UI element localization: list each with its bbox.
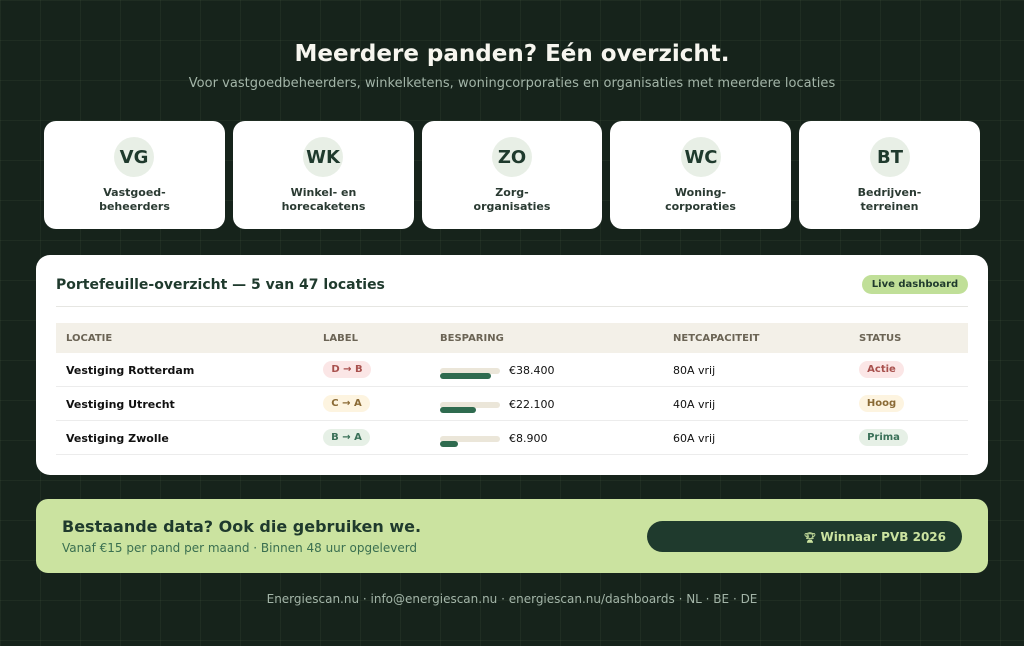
row 1 bar track bbox=[440, 368, 500, 374]
row 3 location: Vestiging Zwolle bbox=[66, 432, 169, 445]
card label bbox=[858, 186, 921, 213]
column: locatie: LOCATIE bbox=[66, 333, 112, 344]
card label bbox=[282, 186, 365, 213]
icon: VG bbox=[114, 137, 154, 177]
row 3 label: B → A bbox=[331, 432, 362, 443]
column: label: LABEL bbox=[323, 333, 358, 344]
panel heading: Portefeuille-overzicht — 5 van 47 locaties bbox=[56, 277, 385, 293]
row 1 location: Vestiging Rotterdam bbox=[66, 364, 194, 377]
card: zorgorganisaties bbox=[422, 121, 602, 229]
column: netcapaciteit: NETCAPACITEIT bbox=[673, 333, 760, 344]
table header row bbox=[56, 323, 968, 353]
row 2 bar fill bbox=[440, 407, 476, 413]
card label: Vastgoed- bbox=[103, 186, 166, 199]
row 1 bar fill bbox=[440, 373, 491, 379]
row 3 label bbox=[323, 429, 370, 446]
row 2 bar track bbox=[440, 402, 500, 408]
row 1 capacity: 80A vrij bbox=[673, 364, 715, 377]
row 3 saving: €8.900 bbox=[509, 432, 548, 445]
row 2 location: Vestiging Utrecht bbox=[66, 398, 175, 411]
card: winkel- en horecaketens bbox=[233, 121, 414, 229]
subtitle: Voor vastgoedbeheerders, winkelketens, woningcorporaties en organisaties met meerdere locaties bbox=[189, 76, 835, 91]
badge: live dashboard bbox=[862, 275, 968, 294]
card label: beheerders bbox=[99, 200, 170, 213]
icon: WK bbox=[303, 137, 343, 177]
card: woningcorporaties bbox=[610, 121, 791, 229]
row 3 status: Prima bbox=[867, 432, 900, 443]
footer: Energiescan.nu · info@energiescan.nu · energiescan.nu/dashboards · NL · BE · DE bbox=[267, 592, 757, 606]
card label: terreinen bbox=[861, 200, 918, 213]
row 3 status bbox=[859, 429, 908, 446]
card label: horecaketens bbox=[282, 200, 365, 213]
icon: WC: WC bbox=[684, 147, 718, 168]
card label: corporaties bbox=[665, 200, 736, 213]
row 3 bar fill bbox=[440, 441, 458, 447]
icon: VG: VG bbox=[120, 147, 148, 168]
icon: WK: WK bbox=[306, 147, 340, 168]
row 1 saving: €38.400 bbox=[509, 364, 554, 377]
row 1 status: Actie bbox=[867, 364, 896, 375]
row 3 bar track bbox=[440, 436, 500, 442]
row 2 label bbox=[323, 395, 370, 412]
card: vastgoedbeheerders bbox=[44, 121, 225, 229]
row 1 label bbox=[323, 361, 371, 378]
row 2 status bbox=[859, 395, 904, 412]
award pill bbox=[647, 521, 962, 552]
row 1 status bbox=[859, 361, 904, 378]
title: Meerdere panden? Eén overzicht. bbox=[294, 41, 730, 67]
row 2 capacity: 40A vrij bbox=[673, 398, 715, 411]
row 2 saving: €22.100 bbox=[509, 398, 554, 411]
icon: ZO bbox=[492, 137, 532, 177]
card: bedrijventerreinen bbox=[799, 121, 980, 229]
card label: Bedrijven- bbox=[858, 186, 921, 199]
card label bbox=[665, 186, 736, 213]
row 1 label: D → B bbox=[331, 364, 363, 375]
row 2 status: Hoog bbox=[867, 398, 896, 409]
banner heading: Bestaande data? Ook die gebruiken we. bbox=[62, 517, 421, 536]
panel: portfolio overview bbox=[36, 255, 988, 475]
icon: BT: BT bbox=[877, 147, 903, 168]
badge: live dashboard: Live dashboard bbox=[872, 279, 958, 290]
card label: organisaties bbox=[474, 200, 550, 213]
row 3 capacity: 60A vrij bbox=[673, 432, 715, 445]
row 2 label: C → A bbox=[331, 398, 362, 409]
column: besparing: BESPARING bbox=[440, 333, 504, 344]
icon: WC bbox=[681, 137, 721, 177]
card label: Winkel- en bbox=[291, 186, 356, 199]
call to action banner bbox=[36, 499, 988, 573]
icon: BT bbox=[870, 137, 910, 177]
card label bbox=[474, 186, 550, 213]
card label bbox=[99, 186, 170, 213]
banner subtext: Vanaf €15 per pand per maand · Binnen 48 uur opgeleverd bbox=[62, 541, 417, 555]
award pill: 🏆︎ Winnaar PVB 2026 bbox=[804, 530, 946, 544]
card label: Woning- bbox=[675, 186, 726, 199]
icon: ZO: ZO bbox=[498, 147, 526, 168]
card label: Zorg- bbox=[495, 186, 529, 199]
column: status: STATUS bbox=[859, 333, 901, 344]
